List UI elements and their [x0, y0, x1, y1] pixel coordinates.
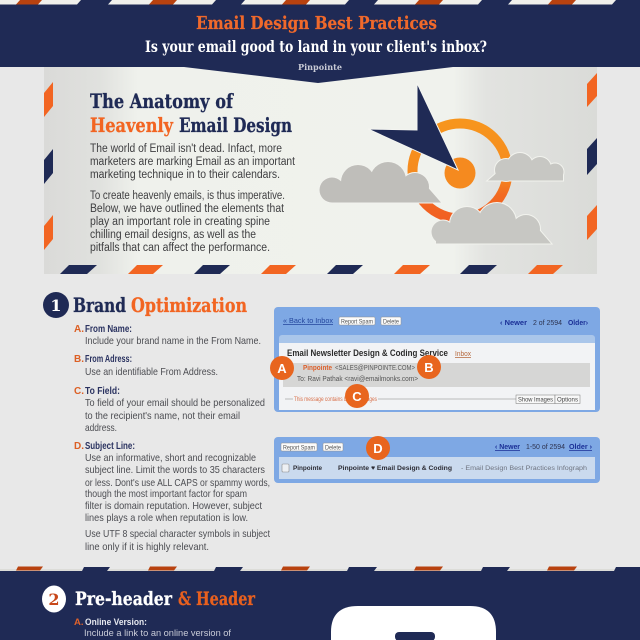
image warning row: Options	[557, 398, 578, 404]
inbox toolbar: Report Spam	[283, 446, 315, 452]
hero intro text: The world of Email isn't dead. Infact, more	[90, 143, 282, 155]
inbox message row: - Email Design Best Practices Infograph	[461, 465, 587, 472]
target rings	[412, 124, 508, 218]
section 2 heading: Pre-header	[75, 589, 172, 610]
item D: subject line: subject line. Limit the words to 35 characters	[85, 464, 265, 476]
item D: subject line: lines plays a role when reputation is low.	[85, 512, 248, 524]
item B: from address: From Adress:	[85, 354, 132, 365]
image warning row: This message contains blocked images	[294, 397, 377, 403]
inbox toolbar: Older ›	[569, 442, 592, 451]
item A: from name: A.	[74, 324, 84, 335]
item C: to field: To field of your email should be personalized	[85, 397, 265, 409]
callout A	[270, 356, 294, 380]
item D: subject line: filter is domain reputation. However, subject	[85, 500, 262, 512]
inbox message row: Pinpointe	[293, 465, 322, 472]
cloud bottom	[432, 203, 551, 244]
number badge 2: 2	[48, 590, 60, 609]
item D: subject line: Subject Line:	[85, 441, 135, 452]
cloud right	[488, 153, 564, 181]
airmail stripes	[0, 566, 640, 571]
left airmail stripes	[44, 82, 53, 250]
section 2 heading: & Header	[178, 589, 255, 610]
item A: online version	[74, 617, 231, 640]
hero intro text: To create heavenly emails, is thus imperative.	[90, 190, 285, 202]
section 1 heading	[73, 293, 247, 317]
subtitle: Is your email good to land in your client's inbox?	[145, 37, 487, 56]
callout D	[366, 436, 390, 460]
device illustration	[331, 606, 496, 640]
callout B: B	[424, 360, 434, 375]
hero intro text: marketers are marking Email as an important	[90, 156, 296, 168]
inbox toolbar: 1-50 of 2594	[526, 442, 565, 451]
inbox message row	[282, 464, 587, 472]
hero heading: Email Design	[179, 114, 292, 137]
item C: to field: To Field:	[85, 386, 120, 397]
header banner	[0, 0, 640, 83]
item B: from address: Use an identifiable From Address.	[85, 366, 218, 378]
hero heading: The Anatomy of	[90, 90, 234, 113]
toolbar: Older›	[568, 318, 588, 327]
callout C	[345, 384, 369, 408]
brand credit: Pinpointe	[298, 62, 342, 72]
section 2: pre-header and header	[0, 566, 640, 640]
image warning row	[285, 395, 580, 404]
number badge 1	[43, 292, 69, 318]
section 1 heading: Optimization	[131, 293, 247, 317]
hero intro text: play an important role in creating spine	[90, 216, 270, 228]
item B: from address	[74, 354, 218, 378]
item D: subject line	[74, 441, 270, 553]
item D: subject line: Use UTF 8 special character symbols in subject	[85, 528, 270, 540]
paper plane	[368, 83, 458, 170]
screenshot: inbox row	[274, 436, 600, 483]
inbox message row: Pinpointe ♥ Email Design & Coding	[338, 465, 452, 472]
top airmail stripes	[0, 0, 616, 4]
callout A: A	[277, 361, 287, 376]
item D: subject line: though the most important factor for spam	[85, 488, 247, 500]
section 1 heading: Brand	[73, 293, 126, 317]
item A: from name: Include your brand name in the From Name.	[85, 335, 261, 347]
item B: from address: B.	[74, 354, 84, 365]
inbox toolbar	[281, 442, 592, 452]
callout C: C	[352, 389, 362, 404]
right airmail stripes	[587, 73, 597, 240]
hero heading: Heavenly	[90, 114, 174, 137]
item D: subject line: or less. Dont's use ALL CAPS or spammy words,	[85, 477, 270, 489]
number badge 1: 1	[50, 296, 62, 315]
toolbar	[283, 316, 588, 327]
sender details: To: Ravi Pathak <ravi@emailmonks.com>	[297, 376, 418, 383]
cloud left	[320, 162, 441, 202]
item A: online version: A.	[74, 617, 84, 628]
item A: online version: Online Version:	[85, 617, 147, 628]
hero intro text	[90, 143, 296, 254]
number badge 2	[42, 586, 66, 612]
item D: subject line: D.	[74, 441, 84, 452]
screenshot: open email	[270, 307, 600, 412]
sender details	[283, 363, 590, 387]
toolbar: Report Spam	[341, 320, 373, 326]
item C: to field	[74, 386, 265, 434]
hero intro text: marketing technique in to their calendars.	[90, 169, 280, 181]
section 1: brand optimization	[43, 292, 270, 553]
panel: airmail envelope hero	[44, 66, 597, 274]
hero intro text: Below, we have outlined the elements that	[90, 203, 285, 215]
inbox toolbar: ‹ Newer	[495, 442, 520, 451]
item A: from name	[74, 324, 261, 347]
illustration: paper plane, target and clouds	[320, 83, 564, 244]
email subject: Email Newsletter Design & Coding Service	[287, 348, 448, 358]
hero heading	[90, 90, 292, 137]
hero intro text: pitfalls that can affect the performance.	[90, 242, 270, 254]
item A: online version: Include a link to an online version of	[84, 628, 231, 639]
item D: subject line: Use an informative, short and recognizable	[85, 452, 256, 464]
title: Email Design Best Practices	[196, 13, 437, 34]
bottom airmail stripes	[60, 265, 563, 274]
inbox toolbar: Delete	[325, 446, 342, 452]
callout B	[417, 355, 441, 379]
item C: to field: to the recipient's name, not their email	[85, 410, 240, 422]
item C: to field: address.	[85, 422, 117, 434]
item D: subject line: line only if it is highly relevant.	[85, 541, 209, 553]
email subject: Inbox	[455, 349, 471, 358]
sender details: Pinpointe	[303, 365, 332, 372]
item C: to field: C.	[74, 386, 84, 397]
toolbar: Delete	[383, 320, 400, 326]
image warning row: Show Images	[518, 398, 553, 404]
section 2 heading	[75, 589, 255, 610]
toolbar: ‹ Newer	[500, 318, 527, 327]
item A: from name: From Name:	[85, 324, 132, 335]
toolbar: « Back to Inbox	[283, 316, 333, 325]
callout D: D	[373, 441, 383, 456]
sender details: <SALES@PINPOINTE.COM>	[335, 365, 415, 372]
toolbar: 2 of 2594	[533, 318, 562, 327]
hero intro text: chilling email designs, as well as the	[90, 229, 256, 241]
